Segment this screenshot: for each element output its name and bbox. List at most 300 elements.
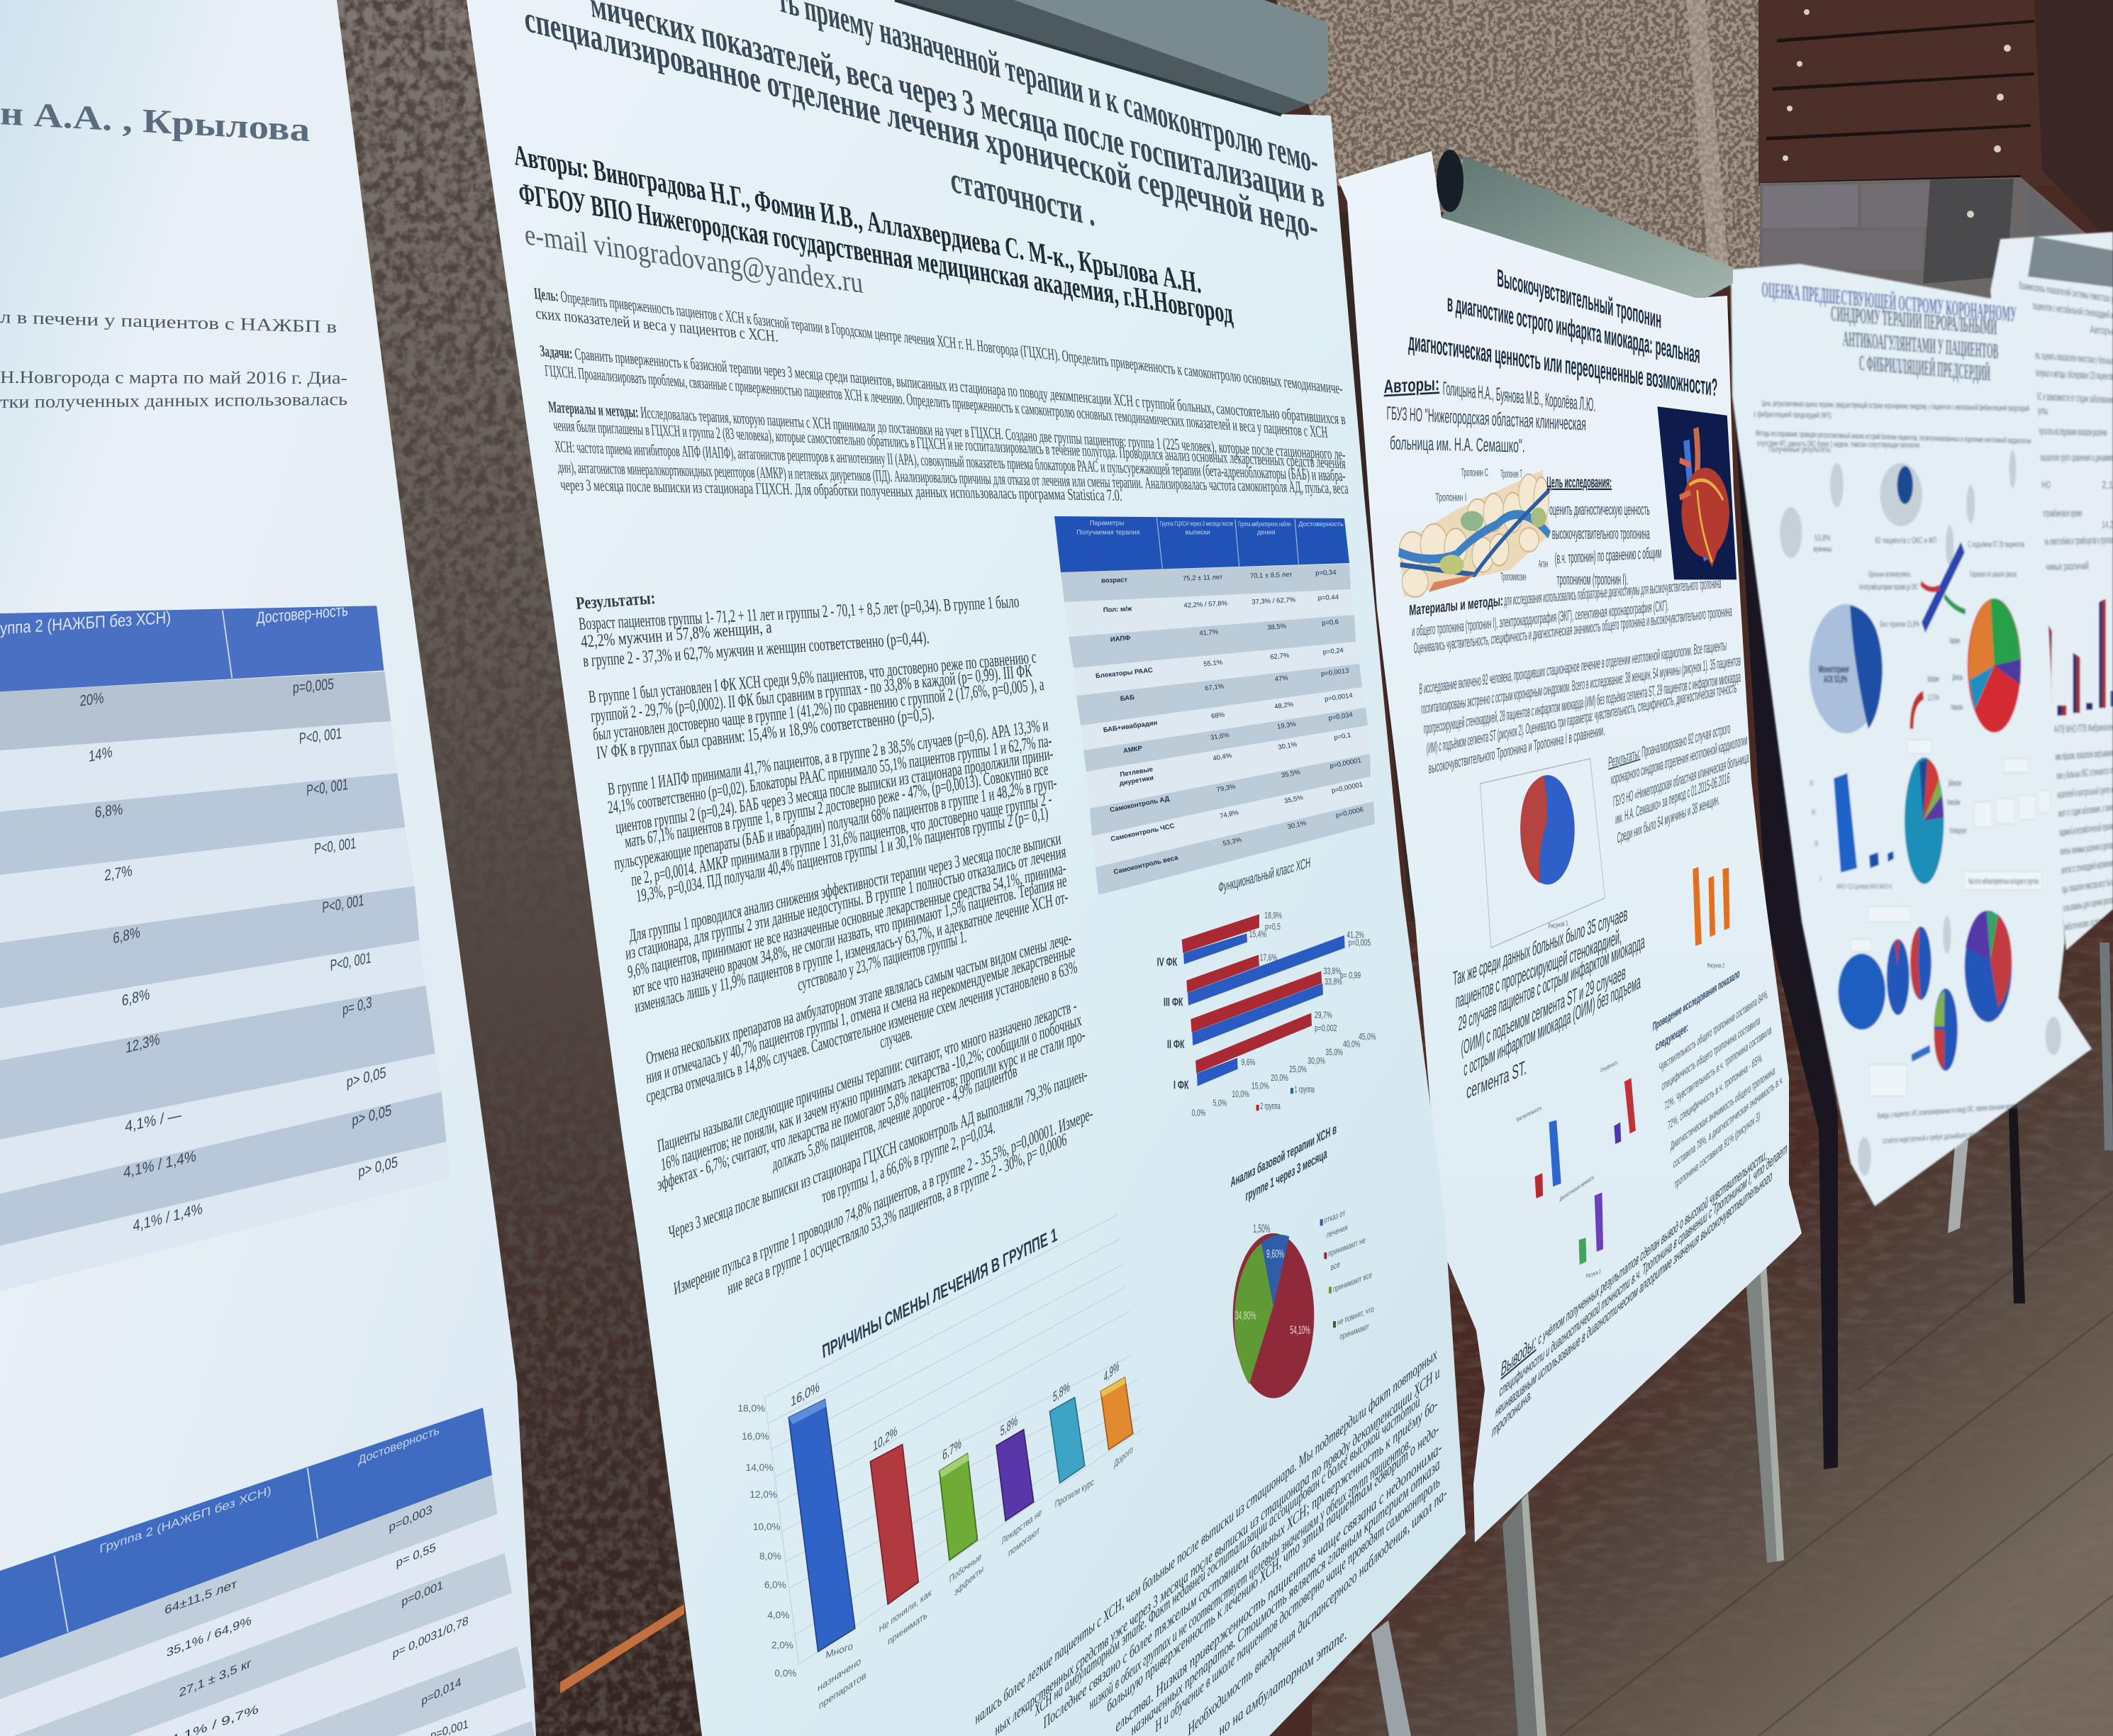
left table upper text: уппа 2 (НАЖБП без ХСН) <box>0 608 171 638</box>
troponin labels: Тропонин Т <box>1500 468 1522 480</box>
left table upper text: 12,3% <box>126 1031 160 1057</box>
table text: p=0,034 <box>1328 711 1354 723</box>
table text: возраст <box>1101 576 1128 585</box>
table text: p=0,24 <box>1322 647 1344 657</box>
poster 4 title <box>1761 278 2017 386</box>
bar labels: 9,6% <box>1242 1057 1255 1067</box>
left table upper text: 6,8% <box>95 801 123 820</box>
conclusions of study text: Чувствительность общего тропонина составила 84%, <box>1659 987 1768 1075</box>
therapy pie: 54,10% <box>1290 1324 1310 1336</box>
poster 4 content <box>1754 278 2061 1175</box>
conclusions of study text: Диагностическая значимость общего тропонина <box>1671 1064 1775 1154</box>
poster 4 labels and boxes: Дабигатран <box>1952 673 1963 682</box>
left table lower <box>0 1408 535 1736</box>
poster 5: far right <box>1985 227 2113 957</box>
results text column: циентов группы 2 (p=0,24). БАБ через 3 месяца после выписки из стационара продолжили прини- <box>615 744 1054 838</box>
therapy pie title: группе 1 через 3 месяца <box>1246 1145 1327 1204</box>
arrows crossing <box>1912 547 1966 1058</box>
wooden wall panels <box>1758 0 2113 245</box>
main poster authors: e-mail vinogradovang@yandex.ru <box>523 218 864 300</box>
left poster upper text <box>0 94 347 412</box>
bar labels: 17,6% <box>1260 953 1277 963</box>
table text: p=0,00001 <box>1331 781 1364 795</box>
functional class bar chart and therapy pie <box>1157 854 1376 1398</box>
main poster conclusions text: ельства. Низкая приверженность пациентов чаще связана с недопонима- <box>1115 1437 1443 1736</box>
bar chart: blue <box>1810 773 1894 891</box>
main poster conclusions text: Необходимость внедрения диспансерного наблюдения, школ па- <box>1187 1483 1448 1736</box>
poster 4 labels and boxes: Варфарин <box>1927 674 1939 683</box>
easel posts and legs <box>1371 298 2113 1736</box>
bar chart: blue: 80 <box>1810 779 1814 788</box>
therapy pie: 9,60% <box>1266 1248 1284 1260</box>
conclusions: неинвазивным использование в диагностическом алгоритме значения высокочувствительного <box>1495 1167 1772 1420</box>
chart axis labels: Дорого <box>1114 1444 1133 1470</box>
table text: БАБ <box>1120 694 1135 703</box>
results text: коронарного синдрома отделения неотложной кардиологии <box>1611 731 1747 788</box>
reasons for treatment change chart: 4,9% <box>1104 1357 1119 1385</box>
bar labels: 15,0% <box>1251 1081 1269 1091</box>
therapy pie legend <box>1320 1208 1374 1342</box>
main poster conclusions text: ХСН на амбулаторном этапе. Факт недавней госпитализации ассоциирован с более высокой частотой <box>1034 1391 1421 1720</box>
poster 4 labels and boxes: 92 пациента с ОКС и ФП <box>1875 536 1936 545</box>
pie: teal <box>1905 757 1944 884</box>
conclusions of study text: составила 78%, а диагностическая значимость в.ч. <box>1673 1073 1783 1172</box>
poster 4 labels and boxes: Антитромбоцитарная терапия до ОКС <box>1859 582 1919 591</box>
bar labels: p=0,005 <box>1349 938 1371 948</box>
horizontal bars <box>1182 914 1345 1086</box>
table text: 79,3% <box>1216 783 1237 794</box>
poster 3 lower content: Рисунок 1 <box>1548 918 1568 930</box>
table text: 75,2 ± 11 лет <box>1183 574 1223 583</box>
heart image <box>1657 406 1736 579</box>
table text: Параметры <box>1090 519 1124 526</box>
paragraph: also among patients: с острым инфарктом миокарда (ОИМ) без подъема <box>1464 970 1641 1081</box>
poster 5 text and chart: МНО <box>2038 479 2051 491</box>
troponin labels: Актин <box>1539 557 1548 570</box>
chart axis labels: Побочные <box>949 1551 981 1586</box>
conclusions of study text: 72%, специфичность в.ч. тропонина - 65%. <box>1668 1051 1763 1133</box>
study aim: Цель исследования: <box>1546 474 1612 491</box>
table text: Самоконтроль ЧСС <box>1110 822 1176 843</box>
table text: АМКР <box>1122 745 1143 755</box>
poster 3 authors <box>1384 373 1595 457</box>
lower ovals pies <box>1838 911 2012 1071</box>
table text: p=0,0006 <box>1335 806 1364 820</box>
results text column: Результаты: <box>575 589 657 613</box>
bar labels: 41,2% <box>1347 930 1364 940</box>
left table lower text: Группа 2 (НАЖБП без ХСН) <box>99 1484 272 1556</box>
poster 4 title: С ФИБРИЛЛЯЦИЕЙ ПРЕДСЕРДИЙ <box>1859 351 1990 386</box>
chart axis labels: 0,0% <box>775 1668 796 1679</box>
conclusions of study text: специфичность общего тропонина составила <box>1662 1013 1761 1094</box>
table text: Блокаторы РААС <box>1095 667 1153 680</box>
poster 5 text and chart: 14,2 <box>2102 519 2113 531</box>
left table upper text: P<0, 001 <box>299 724 342 747</box>
poster 4 title: СИНДРОМУ ТЕРАПИИ ПЕРОРАЛЬНЫМИ <box>1831 302 1997 340</box>
left table lower text: p=0,001 <box>401 1578 443 1609</box>
conclusions of study text: 72%. Чувствительность в.ч. тропонина составила <box>1664 1023 1772 1114</box>
methods text: В исследование включено 92 человека, проходивших стационарное лечение в отделении неотложной кардиологии. Все пациенты <box>1419 637 1727 698</box>
study aim: тропонином (тропонин I). <box>1556 570 1628 588</box>
bar labels: p= 0,99 <box>1340 971 1361 981</box>
table text: 53,3% <box>1222 836 1243 848</box>
left table lower text: p= 0,55 <box>396 1540 436 1570</box>
chart axis labels: 2,0% <box>771 1640 793 1651</box>
poster 4 labels and boxes: остаётся недостаточной и требует дальнейшего улучшения <box>1883 1129 1987 1145</box>
chart bars <box>788 1377 1133 1652</box>
results text: Проанализировано 92 случая острого <box>1641 720 1730 761</box>
conclusions of study text: следующее: <box>1656 1020 1688 1055</box>
poster 5 text and chart: АЧТВ МНО ПТВ Фибриноген <box>2053 721 2113 736</box>
poster 4 labels and boxes: Частота неблагоприятных исходов в группах <box>1968 877 2039 886</box>
chart axis labels: 4,0% <box>767 1610 789 1620</box>
results text column: должать 5,8% пациентов, лечение дорогое - 4,9% пациентов <box>771 1060 1018 1175</box>
methods text: Материалы и методы: <box>1409 592 1503 619</box>
conclusions: специфичности и диагностической точности в.ч. Тропонина в сравнении с Тропонином I, что делает <box>1500 1139 1787 1400</box>
paragraph: also among patients: пациентов с прогрессирующей стенокардией, <box>1456 925 1622 1013</box>
table text: p=0,1 <box>1334 731 1351 742</box>
left table upper text: Достовер-ность <box>257 601 348 628</box>
poster 4 labels and boxes: Дабигатран <box>1948 779 1961 788</box>
results text column: ют все что назначено врачом 34,8%, не смогли назвать, что принимают 1,5% пациентов. Терапия не <box>632 870 1068 1000</box>
table text: Пол: м/ж <box>1103 605 1132 614</box>
poster 5 grey rail <box>2028 236 2113 287</box>
table text: Самоконтроль веса <box>1113 854 1179 877</box>
methods text <box>1409 574 1741 777</box>
left table lower text: p=0,014 <box>421 1675 462 1708</box>
results text column: пе 2, p=0,0014. АМКР принимали в группе 1 31,6% пациентов, что достоверно чаще группы 2 - <box>630 789 1053 890</box>
table text <box>1076 518 1364 877</box>
troponin labels: Тропонин С <box>1461 467 1488 479</box>
table text: 41,7% <box>1199 628 1219 638</box>
left table upper text: p= 0,3 <box>342 994 372 1019</box>
chart axis labels: 6,0% <box>764 1580 786 1591</box>
results text column: в группе 2 - 37,3% и 62,7% мужчин и женщин соответственно (p=0,44). <box>582 628 930 671</box>
results text: Среди них было 54 мужчины и 38 женщин. <box>1617 790 1719 847</box>
chart value labels: 16,0% <box>791 1379 820 1410</box>
results text column: 42,2% мужчин и 57,8% женщин, а <box>580 618 773 652</box>
small bar charts: Специфичность <box>1600 1058 1617 1074</box>
bar labels: 25,0% <box>1289 1064 1307 1075</box>
chart axis labels: 12,0% <box>749 1489 777 1500</box>
aims, tasks, methods: Задачи: Сравнить приверженность к базисной терапии через 3 месяца среди пациентов, выписанных из стационара по поводу декомпенсации ХСН с группой больных, самостоятельно обратившихся в <box>539 341 1347 428</box>
table text: 19,3% <box>1276 720 1297 731</box>
left table lower text: Достоверность <box>358 1423 440 1467</box>
poster 4 title: АНТИКОАГУЛЯНТАМИ У ПАЦИЕНТОВ <box>1843 327 1998 364</box>
small bar charts: Рисунок 3 <box>1586 1267 1601 1280</box>
table text: 67,1% <box>1205 682 1225 693</box>
table text: 47% <box>1274 674 1289 684</box>
poster 3 title: диагностическая ценность или переоцененные возможности? <box>1408 328 1717 402</box>
poster 4 labels and boxes: 12,5% <box>1927 693 1939 702</box>
bar labels: 20,0% <box>1271 1073 1288 1083</box>
reasons for treatment change chart <box>737 1215 1144 1712</box>
chart axis labels: принимать <box>888 1609 927 1648</box>
left table upper text <box>0 601 398 1235</box>
therapy pie: 1,50% <box>1253 1223 1270 1235</box>
left table upper text: 4,1% / 1,4% <box>133 1201 203 1235</box>
paragraph: also among patients: (ОИМ) с подъемом сегмента ST и 29 случаев <box>1461 961 1626 1060</box>
poster 4 labels and boxes: Выводы: у пациентов с ФП, госпитализированных по поводу ОКС, терапия оральными антикоагулянтами <box>1878 1100 2032 1120</box>
poster 4 title: ОЦЕНКА ПРЕДШЕСТВУЮЩЕЙ ОСТРОМУ КОРОНАРНОМУ <box>1761 278 2017 327</box>
poster 4 labels and boxes: С подъёмом ST 29 пациентов <box>1968 540 2024 549</box>
results text column: Возраст пациентов группы 1- 71,2 + 11 лет и группы 2 - 70,1 + 8,5 лет (p=0,34). В группе 1 было <box>578 592 1020 634</box>
aims, tasks, methods: ских показателей и веса у пациентов с ХСН. <box>535 304 779 345</box>
left table upper text: 6,8% <box>122 986 150 1010</box>
poster 3: high-sensitivity troponin <box>1338 150 1802 1542</box>
bar chart: blue: МНО <2,0 Целевое МНО МНО>3 <box>1837 883 1892 891</box>
chart axis labels: Не поняли, как <box>879 1587 932 1636</box>
left table upper text: 2,7% <box>104 862 133 884</box>
pie: monitoring: Мониторинг <box>1819 664 1850 675</box>
poster 4 intro text: Полученные результаты: <box>1768 445 1832 454</box>
chart axis labels: назначено <box>818 1655 861 1694</box>
poster 5 text and chart: значимых различий <box>2036 560 2089 573</box>
chart axis labels: Лекарства не <box>1002 1506 1042 1547</box>
main poster conclusions text: ных лекарственных средств уже через 3 месяца после выписки из стационара по поводу декомпенсации ХСН и <box>994 1363 1441 1736</box>
poster 4 labels and boxes: 53,8% <box>1814 533 1830 542</box>
conclusions: Выводы: <box>1501 1330 1536 1381</box>
small bar charts <box>1516 1058 1636 1280</box>
pie: multicolor <box>1968 599 2021 733</box>
left table upper text: p> 0,05 <box>347 1064 386 1091</box>
paragraph: also among patients: сегмента ST. <box>1466 1057 1527 1104</box>
poster 4 labels and boxes: Без терапии 15,8% <box>1880 620 1919 629</box>
chart axis labels: 8,0% <box>759 1551 781 1562</box>
conclusions of study text <box>1653 967 1783 1192</box>
results text: Результаты: <box>1608 744 1640 771</box>
table text: 35,5% <box>1281 768 1301 779</box>
chart axis labels: препаратов <box>819 1669 866 1712</box>
troponin labels: Тропомиозин <box>1500 571 1527 583</box>
main poster grey rail <box>895 0 1328 115</box>
poster 4: oral anticoagulants <box>1731 264 2092 1206</box>
small bar charts: Диагностическая значимость <box>1560 1173 1594 1203</box>
left poster upper text: Н.Новгорода с марта по май 2016 г. Диа- <box>0 368 347 388</box>
small bar charts: Чувствительность <box>1516 1103 1541 1124</box>
orange bars: Рисунок 2 <box>1707 962 1724 969</box>
therapy pie legend: принимают все <box>1333 1270 1372 1295</box>
main poster conclusions text: нались более легкие пациенты с ХСН, чем больные после выписки из стационара. Мы подтвердили факт повторных <box>974 1345 1438 1728</box>
poster 4 labels and boxes: Клопидогрел <box>1950 826 1967 835</box>
poster 4 labels and boxes: Оральные антикоагулянты <box>1868 569 1910 579</box>
main poster authors: Авторы: Виноградова Н.Г., Фомин И.В., Аллахвердиева С. М-к., Крылова А.Н. <box>512 138 1203 300</box>
results text column: В группе 1 был установлен I ФК ХСН среди 9,6% пациентов, что достоверно реже по сравнению с <box>588 647 1037 707</box>
bar labels: 35,0% <box>1325 1047 1343 1058</box>
orange bars <box>1693 867 1729 969</box>
table text: выписки <box>1186 528 1210 535</box>
chart value labels: 6,7% <box>942 1435 961 1464</box>
chart value labels: 5,8% <box>1053 1379 1070 1406</box>
functional class title: Функциональный класс ХСН <box>1218 854 1310 896</box>
bar labels: 0,0% <box>1192 1108 1205 1118</box>
poster 5 text and chart: Авторы <box>2090 324 2113 338</box>
chart value labels <box>791 1357 1119 1464</box>
table text: 38,5% <box>1267 623 1287 632</box>
chart axis labels: эффекты <box>954 1563 983 1598</box>
main poster conclusions text: но на амбулаторном этапе. <box>1218 1625 1348 1736</box>
left table upper text: P<0, 001 <box>306 775 348 799</box>
bar labels: I ФК <box>1173 1079 1189 1091</box>
therapy pie title <box>1231 1121 1337 1204</box>
therapy pie legend: лечения <box>1327 1223 1348 1240</box>
poster 4 labels and boxes <box>1813 533 2049 1145</box>
chart title: ПРИЧИНЫ СМЕНЫ ЛЕЧЕНИЯ В ГРУППЕ 1 <box>821 1223 1058 1362</box>
table text: p=0,34 <box>1315 569 1337 577</box>
table text: 74,8% <box>1219 808 1239 820</box>
therapy pie: 34,80% <box>1235 1309 1256 1322</box>
main poster table <box>1054 516 1375 895</box>
bar labels: 1 группа <box>1295 1085 1315 1095</box>
bar labels: p=0,002 <box>1315 1023 1337 1034</box>
results text column: сутствовало у 23,7% пациентов группы 1. <box>797 926 968 995</box>
table text: 37,3% / 62,7% <box>1251 596 1296 606</box>
methods text: для исследования использовались лабораторные диагностикумы для высокочувствительного тропонина <box>1504 574 1722 609</box>
main poster title <box>522 0 1326 247</box>
results text column: ние веса в группе 1 осуществляло 53,3% пациентов, а в группе 2 - 30%, p= 0,0006 <box>727 1129 1068 1299</box>
left table upper text: 4,1% / — <box>125 1106 182 1135</box>
left table lower text: p= 0,0031/0,78 <box>393 1613 469 1661</box>
results text column: был установлен достоверно чаще в группе 1 (41,2%) по сравнению с группой 2 (17,6%, p=0,005 ), а <box>592 675 1045 745</box>
main poster conclusions text: Н и обучение в школе пациентов достоверно чаще проводят самоконтроль <box>1154 1471 1441 1736</box>
table text: дения <box>1257 528 1276 535</box>
table text: БАБ+ивабрадин <box>1103 719 1158 734</box>
bar chart: blue: 0 <box>1819 874 1822 883</box>
results text column: из стационара, для группы 2 эти данные недоступны. В группе 1 полностью отказались от лечения <box>625 842 1067 964</box>
conclusions <box>1492 1139 1787 1442</box>
table text: Группа ГЦХСН через 3 месяца после <box>1160 520 1233 527</box>
poster 4 intro text: Цель: ретроспективная оценка терапии, предшествующей острому коронарному синдрому, у пациентов с неклапанной фибрилляцией предсердий <box>1761 399 2029 413</box>
chart axis labels: Пропили курс <box>1055 1476 1094 1510</box>
results text column: случаев. <box>879 1022 913 1052</box>
table text: 62,7% <box>1270 652 1290 662</box>
table text: 30,1% <box>1278 740 1298 752</box>
table text: p=0,0014 <box>1324 691 1353 703</box>
troponin illustration <box>1399 470 1549 597</box>
left table upper text: 4,1% / 1,4% <box>123 1147 196 1182</box>
table text: 42,2% / 57,8% <box>1183 600 1228 610</box>
results text column: эффектах - 6,7%; считают, что лекарства не помогают 5,8% пациентов; пропили курс и не стали про- <box>657 1024 1086 1195</box>
table text: 55,1% <box>1203 659 1223 668</box>
pie: monitoring <box>1810 604 1883 733</box>
poster 3 authors: больница им. Н.А. Семашко". <box>1390 433 1525 457</box>
left table lower text <box>99 1423 469 1736</box>
results text column: Для группы 1 проводился анализ снижения эффективности терапии через 3 месяца после выписки <box>628 828 1062 946</box>
therapy pie <box>1233 1223 1314 1398</box>
left table lower text: 64±11,5 лет <box>165 1577 237 1617</box>
aims, tasks, methods: через 3 месяца после выписки из стационара ГЦХСН. Для обработки полученных данных использовалась программа Statistica 7.0. <box>559 475 1122 504</box>
left table lower text: 35,1% / 64,9% <box>167 1613 252 1659</box>
results text column: Измерение пульса в группе 1 проводило 74,8% пациентов, а в группе 2 - 35,5%, p=0,00001. Измере- <box>673 1103 1094 1299</box>
chart value labels: 5,8% <box>1000 1412 1018 1440</box>
left table upper text: 14% <box>89 742 113 765</box>
study aim: (в.ч. тропонин) по сравнению с общим <box>1555 544 1661 567</box>
pie: monitoring: АСК 53,8% <box>1824 674 1848 686</box>
poster 4 labels and boxes: мужчины <box>1813 544 1832 553</box>
left table lower text: p=0,003 <box>389 1502 433 1535</box>
left poster upper text: н А.А. , Крылова <box>0 94 310 149</box>
table text: диуретики <box>1119 774 1154 788</box>
therapy pie legend: принимают <box>1339 1321 1369 1342</box>
results text: им. Н.А. Семашко» за период с 01.2015-06.2016 <box>1615 769 1730 828</box>
poster 3 authors: Голицына Н.А., Буянова М.В., Королёва Л.Ю. <box>1443 378 1595 416</box>
aims, tasks, methods: ХСН: частота приема ингибиторов АПФ (ИАПФ), антагонистов рецепторов к ангиотензину II (АРА), совокупный показатель приема блокаторов РААС и пульсурежающей терапии (бета-адреноблокаторы (БАБ) и ивабра- <box>554 437 1346 484</box>
bar labels: 10,0% <box>1232 1089 1249 1099</box>
conclusions of study text: тропонина составила 91% (рисунок 3) <box>1675 1110 1760 1192</box>
figure 1 pie <box>1481 759 1605 947</box>
main poster conclusions text: назначенных препаратов. Стоимость является главным критерием отказа <box>1130 1454 1441 1736</box>
bar chart: blue: 30 <box>1814 840 1818 848</box>
table text: Группа амбулаторного наблю- <box>1238 521 1292 528</box>
table text: 31,6% <box>1210 731 1230 742</box>
results text column: изменялась лишь у 11,9% пациентов в группе 1, изменялась-у 63,7%, и адекватное лечение ХСН от- <box>634 886 1069 1017</box>
poster 3 upper content <box>1384 265 1749 947</box>
results text column: Пациенты называли следующие причины смены терапии: считают, что много назначено лекарств - <box>657 995 1078 1157</box>
table text: Получаемая терапия <box>1076 528 1139 535</box>
methods text: Оценивались чувствительность, специфичность и диагностическая значимость общего тропонина и высокочувствительного тропонина <box>1414 603 1732 657</box>
poster 4 labels and boxes: Апиксабан <box>1947 798 1960 807</box>
left poster upper text: л в печени у пациентов с НАЖБП в <box>0 308 337 337</box>
results text column: средства отмечались в 14,8% случаев. Самостоятельное изменение схем лечения установлено в 63% <box>645 956 1078 1107</box>
results text: ГБУЗ НО «Нижегородская областная клиническая больница <box>1613 748 1749 811</box>
methods text: прогрессирующей стенокардией, 28 пациентов с инфарктом миокарда (ИМ) без подъёма сегмента ST, 29 пациентов с инфарктом миокарда <box>1424 668 1741 738</box>
main poster conclusions text <box>974 1345 1448 1736</box>
results text column: Отмена нескольких препаратов на амбулаторном этапе являлась самым частым видом смены лече- <box>645 928 1073 1069</box>
aims, tasks, methods: ГЦХСН. Проанализировать проблемы, связанные с приверженностью пациентов ХСН к лечению. Определить приверженность к самоконтролю основных гемодинамических показателей и веса у пациентов с ХСН <box>544 361 1328 441</box>
table text: ИАПФ <box>1110 634 1131 644</box>
paragraph: also among patients: Так же среди данных больных было 35 случаев <box>1453 903 1627 990</box>
poster 4 intro text: Методы исследования: проведён ретроспективный анализ историй болезни пациентов, госпитализированных в отделение неотложной кардиологии <box>1756 428 2031 445</box>
poster 4 labels and boxes: Варфарин <box>1950 636 1960 645</box>
conclusions of study text: Проведение исследования показало <box>1653 967 1740 1034</box>
poster 4 labels and boxes: Терапия по шкале риска <box>1969 569 2017 579</box>
poster 3 authors: ГБУЗ НО "Нижегородская областная клиническая <box>1386 403 1586 435</box>
chart value labels: 10,2% <box>873 1423 897 1454</box>
poster 5 text and chart <box>2019 279 2113 934</box>
main poster title: специализированное отделение лечения хронической сердечной недо- <box>522 0 1320 247</box>
bar labels: 2 группа <box>1260 1101 1281 1112</box>
bar labels: 33,8% <box>1324 967 1341 976</box>
chart axis labels: Много <box>825 1640 853 1661</box>
results text column <box>575 589 1094 1299</box>
results text column: тов группы 1, а 66,6% в группе 2, p=0,034. <box>821 1117 996 1207</box>
main poster title: статочности . <box>948 160 1096 235</box>
main poster authors <box>512 138 1234 330</box>
bar labels: III ФК <box>1164 996 1183 1008</box>
methods text: (ИМ) с подъёмом сегмента ST (рисунок 2). Оценивались три параметра: чувствительность, специфичность, диагностическая точность <box>1427 679 1736 757</box>
results text <box>1608 720 1749 847</box>
results text column: мать 67,1% пациентов в группе 1, в группы 2 достоверно реже - 47%, (p=0,0013). Совокупно все <box>624 760 1049 852</box>
left table upper text: P<0, 001 <box>314 834 356 857</box>
main poster conclusions text: Последнее связано с более тяжелым состоянием больных ХСН; приверженность к приёму бо- <box>1042 1393 1439 1733</box>
results text column: Через 3 месяца после выписки из стационара ГЦХСН самоконтроль АД выполняли 79,3% пациен- <box>668 1064 1088 1243</box>
main poster authors: ФГБОУ ВПО Нижегородская государственная медицинская академия, г.Н.Новгород <box>517 177 1234 330</box>
poster 3 title <box>1408 265 1717 402</box>
bar labels: 30,0% <box>1308 1056 1325 1066</box>
left table upper text: P<0, 001 <box>322 891 364 916</box>
poster 5 text and chart: группы <box>2035 405 2048 417</box>
bar chart: blue: 60 <box>1812 808 1816 816</box>
aims, tasks, methods: Материалы и методы: Исследовалась терапия, которую пациенты с ХСН принимали до постановки на учет в ГЦХСН. Создано две группы пациентов: группа 1 (225 человек), которые после стационарного ле- <box>547 397 1346 463</box>
study aim: высокочувствительного тропонина <box>1552 525 1650 542</box>
left table upper text: 20% <box>79 689 104 709</box>
chart axis labels: 10,0% <box>753 1521 780 1532</box>
left table upper text: p=0,005 <box>293 675 334 696</box>
left table upper <box>0 601 451 1291</box>
table text: p=0,6 <box>1322 618 1339 628</box>
table text: Достоверность <box>1298 521 1344 528</box>
table text: p=0,44 <box>1317 594 1339 602</box>
